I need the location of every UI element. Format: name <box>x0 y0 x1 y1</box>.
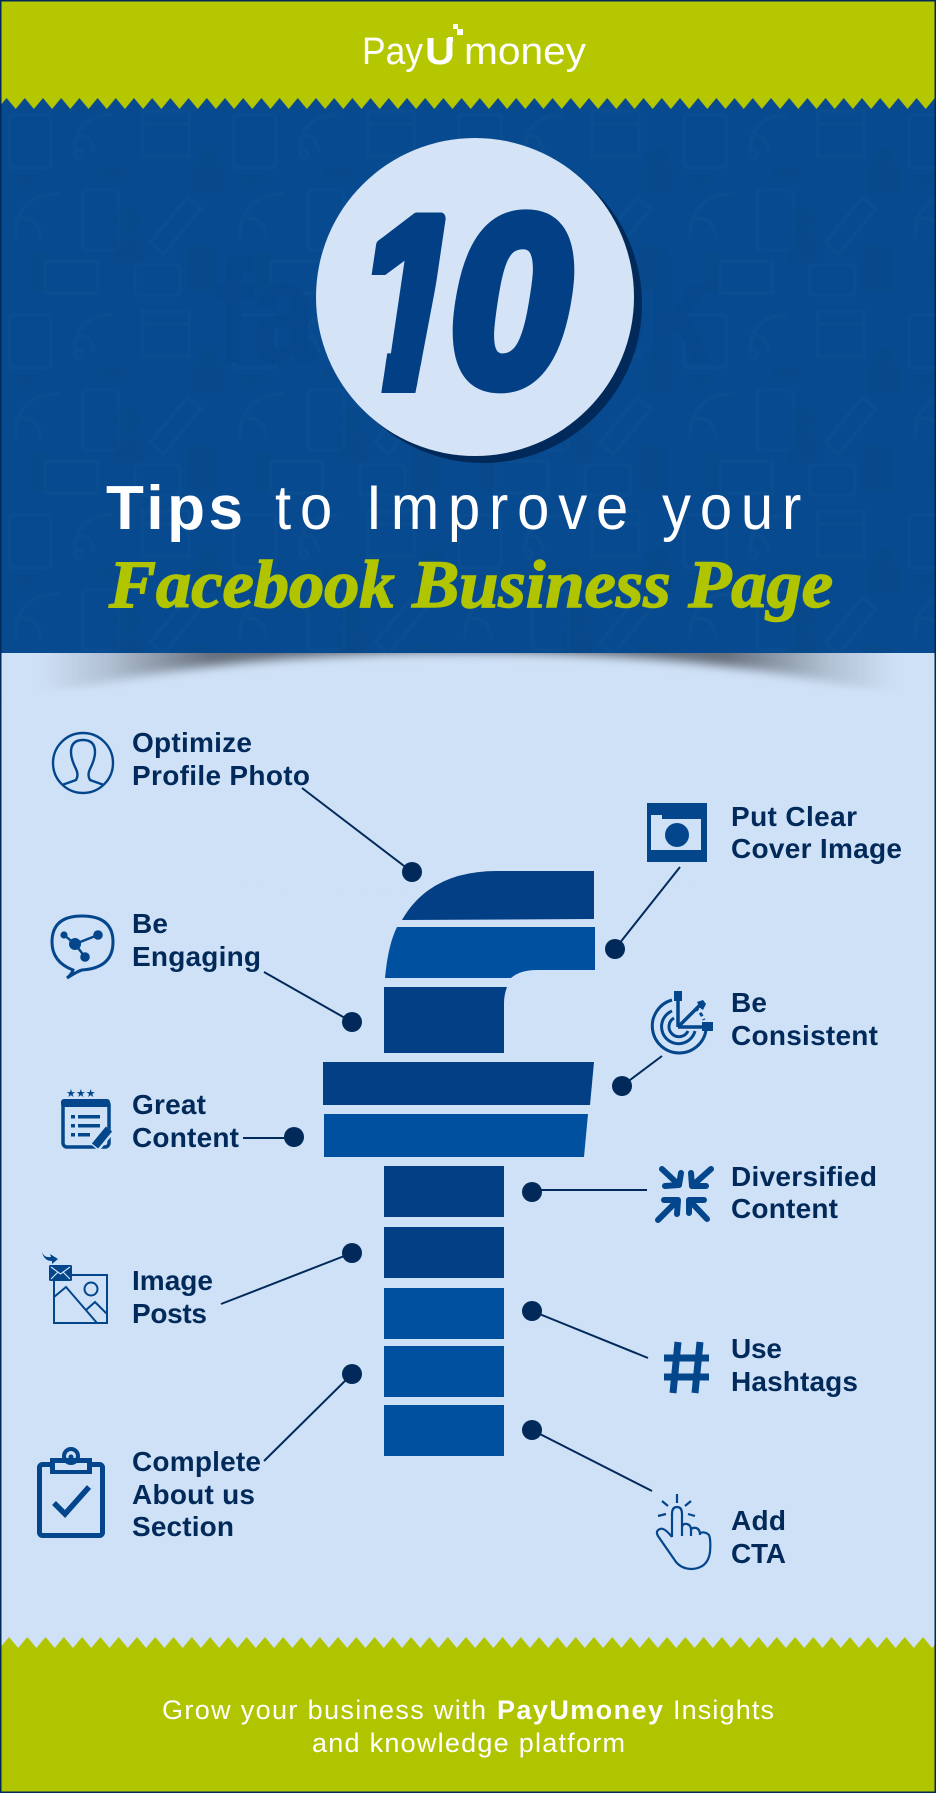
connector <box>302 788 422 882</box>
faint facebook wordmark: facebook <box>215 230 711 393</box>
number 10: 0 <box>450 167 570 436</box>
facebook f built of ten segments <box>323 871 595 1456</box>
label: About us <box>132 1479 255 1510</box>
tip: Put Clear Cover Image <box>605 801 902 959</box>
top logo band <box>0 0 936 109</box>
label: Be <box>132 908 168 939</box>
label: Complete <box>132 1446 261 1477</box>
footer text: PayUmoney <box>497 1695 663 1725</box>
subtitle: Facebook Business Page <box>108 546 833 622</box>
label: Be <box>731 987 767 1018</box>
label <box>132 727 310 791</box>
title: Tips <box>106 474 243 543</box>
footer text <box>162 1695 774 1758</box>
connector <box>605 867 680 959</box>
icon: camera <box>647 803 707 862</box>
tip: Optimize Profile Photo <box>53 727 422 882</box>
footer text: and knowledge platform <box>312 1728 625 1758</box>
icon: image with envelope <box>42 1252 107 1323</box>
tip: Diversified Content <box>522 1161 877 1224</box>
icon: profile <box>53 733 113 793</box>
icon: hash <box>664 1342 709 1393</box>
connector <box>264 1364 362 1461</box>
connector <box>221 1243 362 1304</box>
tip: Use Hashtags <box>522 1301 858 1397</box>
label: Add <box>731 1505 786 1536</box>
label <box>731 801 902 864</box>
label <box>132 1446 261 1542</box>
label <box>731 1161 877 1224</box>
label: Posts <box>132 1298 207 1329</box>
label: Consistent <box>731 1020 878 1051</box>
icon: chat network <box>52 916 113 978</box>
logo: PayUmoney: Pay <box>362 31 423 73</box>
connector <box>612 1056 662 1096</box>
tip: Complete About us Section <box>40 1364 362 1542</box>
label <box>132 1265 213 1329</box>
icon: target with arrows <box>652 991 713 1053</box>
label: Optimize <box>132 727 252 758</box>
tip: Image Posts <box>42 1243 362 1329</box>
label: Engaging <box>132 941 261 972</box>
logo: PayUmoney: money <box>464 31 586 73</box>
label: Use <box>731 1333 782 1364</box>
footer text: Insights <box>673 1695 774 1725</box>
tip: Be Consistent <box>612 987 878 1096</box>
connector <box>522 1301 648 1358</box>
icon: notepad with stars <box>61 1087 110 1147</box>
label <box>731 1505 786 1569</box>
number 10: 1 <box>356 166 460 440</box>
icon: notepad with stars: ★★★ <box>66 1087 96 1100</box>
label: Great <box>132 1089 206 1120</box>
title <box>106 472 833 622</box>
icon: clipboard check <box>40 1449 102 1536</box>
label: Content <box>132 1122 239 1153</box>
footer band <box>0 1637 936 1793</box>
label: Content <box>731 1193 838 1224</box>
label: CTA <box>731 1538 786 1569</box>
label <box>132 908 261 972</box>
label: Hashtags <box>731 1366 858 1397</box>
logo: PayUmoney: U <box>425 31 455 73</box>
label: Cover Image <box>731 833 902 864</box>
connector <box>522 1182 647 1202</box>
icon: inward arrows <box>658 1169 711 1220</box>
tip: Be Engaging <box>52 908 362 1032</box>
connector <box>522 1420 652 1491</box>
icon: tapping hand <box>657 1494 710 1569</box>
logo: PayUmoney <box>362 24 586 73</box>
tip: Great Content <box>61 1087 304 1153</box>
tip: Add CTA <box>522 1420 786 1569</box>
label: Section <box>132 1511 234 1542</box>
label: Put Clear <box>731 801 857 832</box>
number 10 <box>372 209 574 394</box>
label <box>731 987 878 1051</box>
label <box>731 1333 858 1397</box>
label: Diversified <box>731 1161 877 1192</box>
label: Image <box>132 1265 213 1296</box>
big number badge <box>316 138 642 463</box>
connector <box>243 1127 304 1147</box>
footer text: Grow your business with <box>162 1695 486 1725</box>
title: to Improve your <box>275 472 801 543</box>
header shadow <box>0 640 936 884</box>
label: Profile Photo <box>132 760 310 791</box>
connector <box>264 972 362 1032</box>
label <box>132 1089 239 1153</box>
